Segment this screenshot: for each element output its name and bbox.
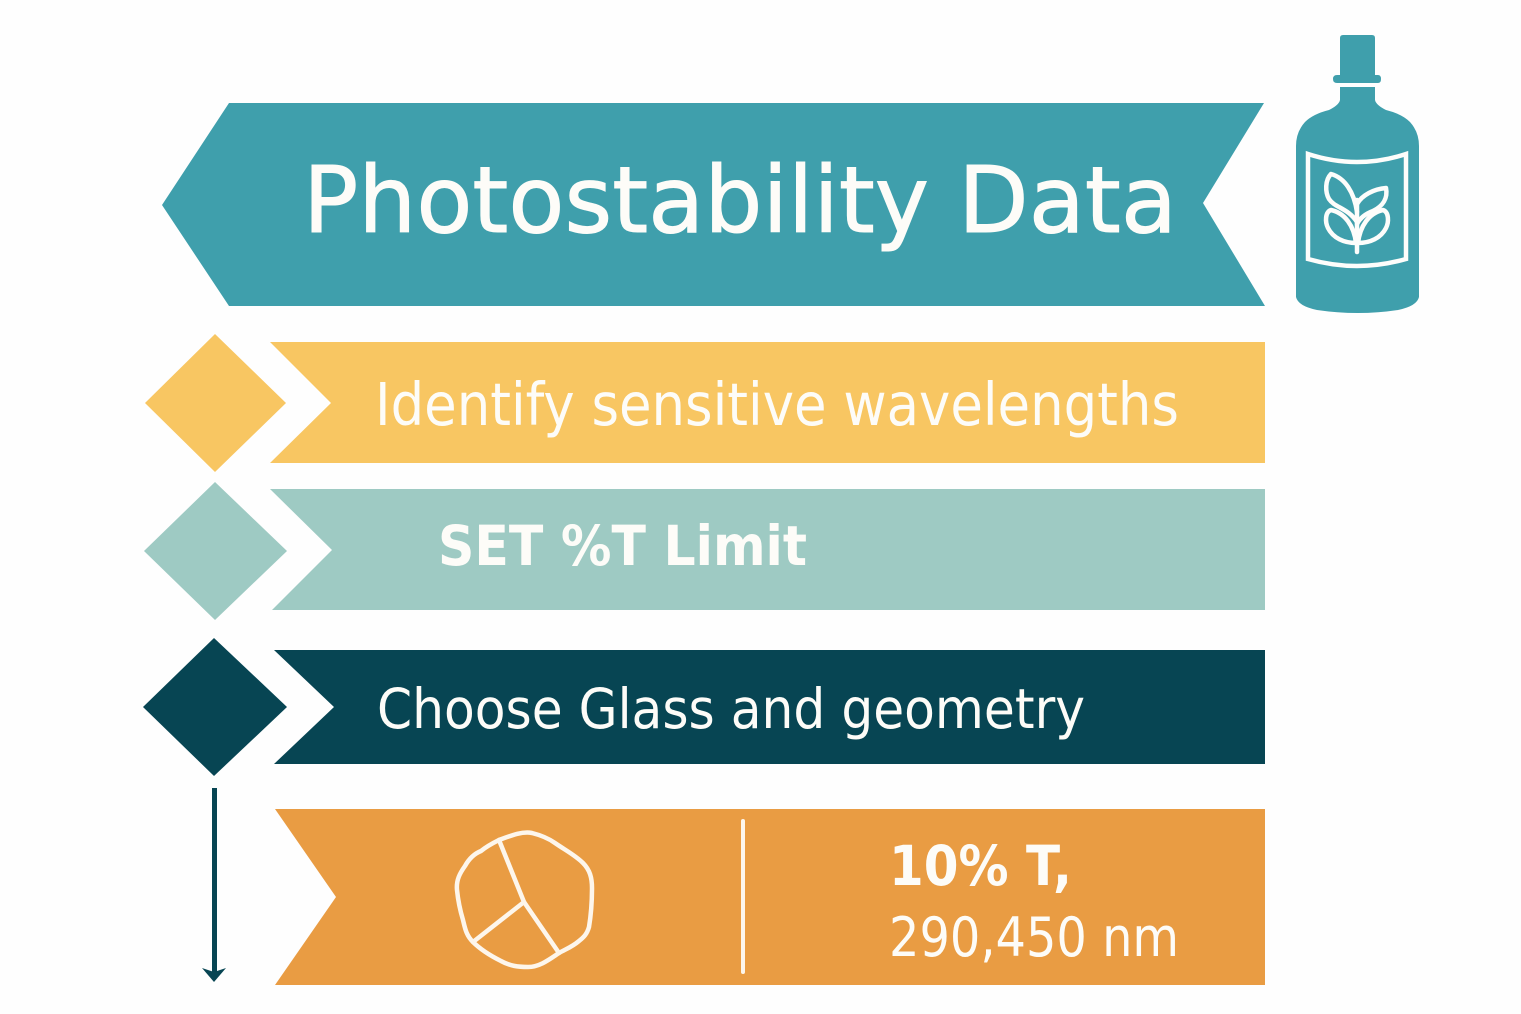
icon: bottle with plant label	[1296, 35, 1419, 313]
banner: choose glass and geometry	[274, 650, 1265, 764]
banner: identify sensitive wavelengths: Identify sensitive wavelengths	[375, 370, 1179, 439]
banner: set %T limit: SET %T Limit	[438, 514, 807, 578]
title: Photostability Data	[303, 147, 1177, 254]
arrow: downward	[202, 788, 226, 982]
banner: choose glass and geometry: Choose Glass and geometry	[377, 677, 1085, 741]
bottle label outline	[1308, 154, 1406, 266]
bottle body	[1296, 87, 1419, 313]
banner: identify sensitive wavelengths	[270, 342, 1265, 463]
value: 10% T: 10% T,	[889, 834, 1072, 898]
value: wavelengths: 290,450 nm	[889, 906, 1179, 969]
diamond: light teal	[144, 482, 287, 620]
diamond: yellow	[145, 334, 286, 472]
icon: pie outline	[457, 833, 592, 967]
plant icon	[1326, 174, 1388, 252]
diamond: dark teal	[143, 638, 287, 776]
divider	[741, 819, 745, 974]
banner: result	[275, 809, 1265, 985]
title banner	[162, 103, 1265, 306]
banner: set %T limit	[270, 489, 1265, 610]
